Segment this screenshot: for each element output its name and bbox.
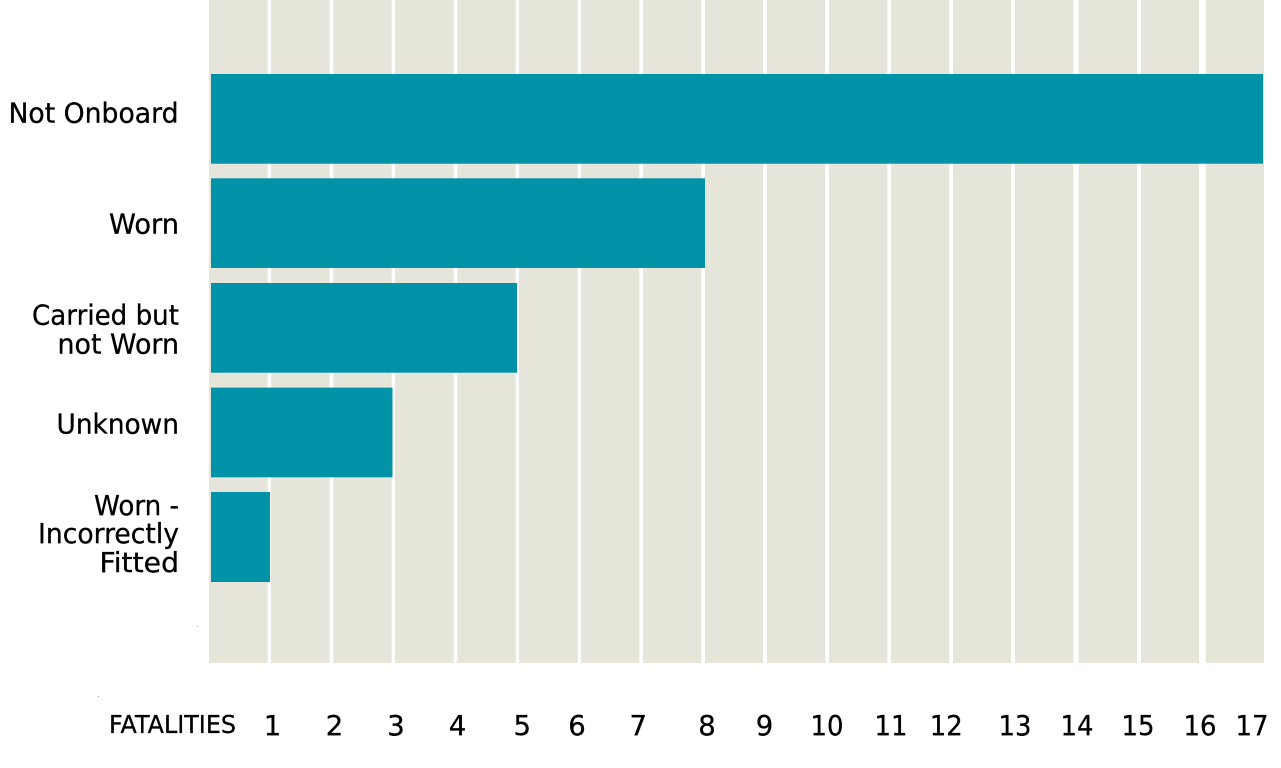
chart background columns <box>209 0 1264 663</box>
axis numbers: 8 <box>698 710 716 742</box>
bar: Worn, 8 <box>211 178 705 268</box>
axis numbers: 5 <box>514 710 531 742</box>
axis numbers: 11 <box>874 710 908 742</box>
axis numbers: 4 <box>449 710 466 742</box>
label: Worn: Worn <box>109 208 179 240</box>
axis numbers: 1 <box>264 710 281 742</box>
axis numbers: 9 <box>756 710 773 742</box>
label: Carried but not Worn: Carried but <box>32 300 179 332</box>
axis numbers: 3 <box>387 710 405 742</box>
bar: Unknown, 3 <box>211 388 392 477</box>
axis numbers: 10 <box>810 710 844 742</box>
category labels <box>8 98 179 579</box>
axis numbers: 14 <box>1060 710 1094 742</box>
label: Worn - Incorrectly Fitted: Incorrectly <box>38 518 179 550</box>
axis numbers: 15 <box>1122 710 1154 742</box>
axis numbers: 17 <box>1236 710 1268 742</box>
axis numbers: 16 <box>1184 710 1216 742</box>
bars <box>211 74 1263 582</box>
axis title: FATALITIES <box>109 710 236 739</box>
axis numbers: 7 <box>629 710 647 742</box>
bar: Carried but not Worn, 5 <box>211 283 517 373</box>
axis numbers <box>264 710 1268 742</box>
bar: Worn - Incorrectly Fitted, 1 <box>211 492 270 582</box>
bar: Not Onboard, 17 <box>211 74 1263 164</box>
axis numbers: 2 <box>326 710 343 742</box>
label: Carried but not Worn <box>32 300 179 360</box>
label: Worn - Incorrectly Fitted: Worn - <box>94 490 179 522</box>
axis numbers: 6 <box>568 710 586 742</box>
label: Worn - Incorrectly Fitted: Fitted <box>100 547 179 579</box>
axis numbers: 13 <box>998 710 1032 742</box>
label: Unknown: Unknown <box>56 408 179 440</box>
label: Carried but not Worn: not Worn <box>58 328 179 360</box>
label: Worn - Incorrectly Fitted <box>38 490 179 579</box>
label: Not Onboard: Not Onboard <box>8 98 178 130</box>
axis numbers: 12 <box>930 710 963 742</box>
